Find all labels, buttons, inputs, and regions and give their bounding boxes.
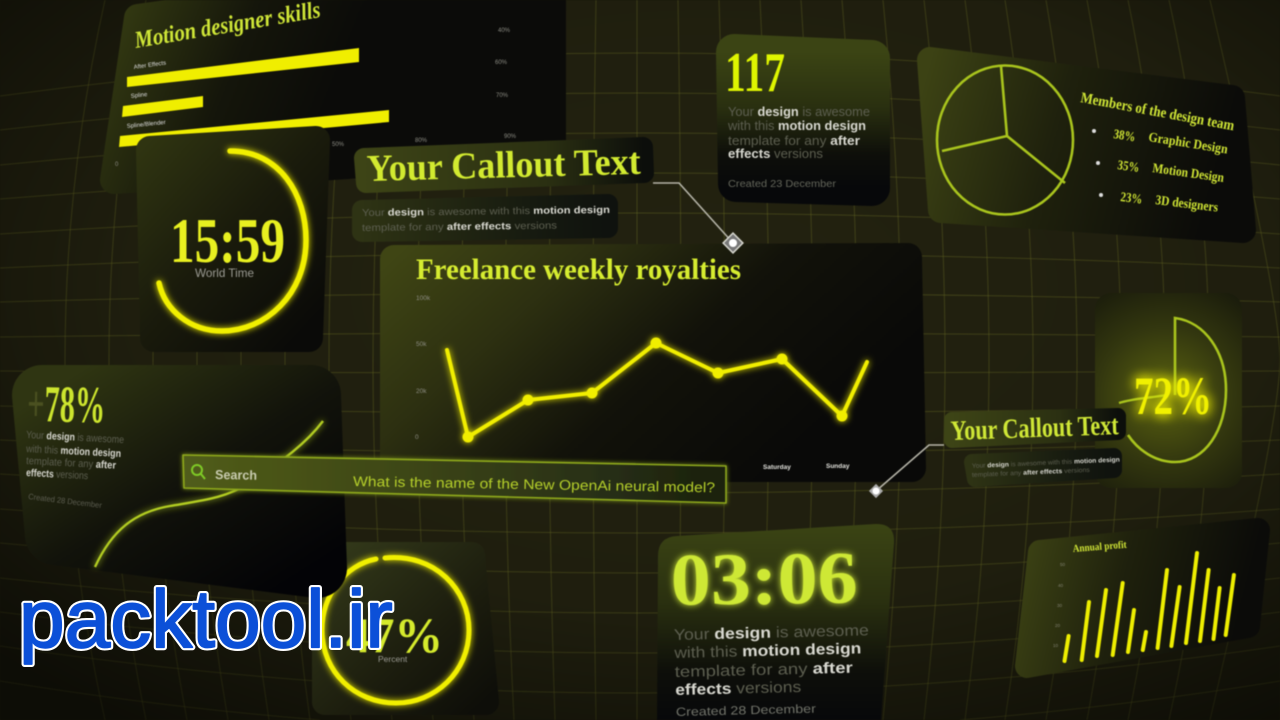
text block: 117 body: effects versions xyxy=(728,147,823,161)
heading: freelance title: Freelance weekly royalties xyxy=(416,253,741,286)
text block: 78 body: Your design is awesome xyxy=(26,429,124,446)
trend curve xyxy=(95,421,323,567)
pie chart xyxy=(937,66,1073,214)
panel: members of the design team xyxy=(930,60,1243,230)
callout body xyxy=(362,204,610,234)
watermark: packtool.ir xyxy=(19,574,393,665)
callout: right xyxy=(869,410,1120,498)
search query: What is the name of the New OpenAi neural model? xyxy=(353,473,715,495)
axis labels xyxy=(115,28,517,168)
legend: 38% xyxy=(1113,126,1137,144)
callout body: template for any after effects versions xyxy=(972,467,1091,479)
percent: 47%: 47% xyxy=(346,607,443,663)
label: percent: Percent xyxy=(378,654,408,664)
text block: 117 body: with this motion design xyxy=(727,119,866,133)
pie outline xyxy=(1128,318,1226,462)
axis labels: 40% xyxy=(498,28,511,34)
callout: top xyxy=(362,141,743,253)
axis labels: 80% xyxy=(415,138,428,144)
y axis labels: 50 xyxy=(1060,562,1066,567)
bar: after effects: After Effects xyxy=(133,61,167,71)
bar: blender xyxy=(119,110,389,147)
axis labels: 100k xyxy=(416,295,431,302)
text block: 78 body xyxy=(25,429,124,482)
label: search: Search xyxy=(215,467,257,483)
text block: 03:06 body: Your design is awesome xyxy=(674,622,869,644)
bar: blender: Spline/Blender xyxy=(127,120,166,130)
text block: 03:06 body: template for any after xyxy=(675,660,853,681)
panel: 72 percent xyxy=(1111,309,1226,472)
bar: after effects xyxy=(127,48,359,87)
y axis labels: 30 xyxy=(1057,603,1063,608)
text block: 03:06 body: with this motion design xyxy=(673,640,861,662)
axis labels: 60% xyxy=(495,60,508,66)
callout body: Your design is awesome with this motion design xyxy=(362,205,610,219)
date: 117: Created 23 December xyxy=(728,179,837,190)
panel: 47 percent ring xyxy=(322,555,486,703)
callout header: Your Callout Text xyxy=(950,410,1120,447)
callout body: template for any after effects versions xyxy=(362,221,557,234)
y axis labels: 20 xyxy=(1055,623,1061,628)
heading: annual profit: Annual profit xyxy=(1072,540,1128,555)
axis labels: 0 xyxy=(415,434,419,441)
heading: members title: Members of the design team xyxy=(1079,90,1236,134)
axis labels xyxy=(415,295,431,441)
axis labels: 50k xyxy=(416,341,427,348)
text block: 117 body: Your design is awesome xyxy=(728,105,870,119)
callout header: Your Callout Text xyxy=(366,141,641,190)
legend: 35% xyxy=(1117,157,1140,175)
panel: 78 percent xyxy=(25,376,323,568)
bars xyxy=(1064,553,1234,661)
panel: 117 stat xyxy=(725,42,872,190)
icon: search xyxy=(192,465,205,479)
axis labels: 0 xyxy=(115,162,119,168)
axis labels: 50% xyxy=(332,142,345,148)
axis labels: 90% xyxy=(504,134,517,140)
text block: 117 body: template for any after xyxy=(728,134,860,148)
text block: 03:06 body xyxy=(673,622,870,699)
text block: 78 body: template for any after xyxy=(26,455,116,472)
callout body: Your design is awesome with this motion design xyxy=(972,457,1120,470)
day labels: Saturday xyxy=(763,464,791,471)
y axis labels xyxy=(1053,562,1066,648)
bar: spline xyxy=(122,92,203,117)
legend: 23% xyxy=(1120,189,1143,207)
connector with diamond xyxy=(869,445,944,498)
panel: line chart freelance royalties xyxy=(394,253,912,471)
panel: motion designer skills xyxy=(114,0,552,180)
date: 03:06: Created 28 December xyxy=(676,702,816,719)
number: 117: 117 xyxy=(725,42,785,104)
y axis labels: 10 xyxy=(1053,643,1059,648)
day labels: Sunday xyxy=(826,463,850,470)
panel: world time clock xyxy=(150,140,316,338)
percent: +78%: +78% xyxy=(27,376,106,434)
bar: spline: Spline xyxy=(131,92,148,100)
text block: 03:06 body: effects versions xyxy=(675,679,802,699)
text block: 78 body: with this motion design xyxy=(25,443,121,460)
label: world time: World Time xyxy=(195,266,254,280)
text block: 117 body xyxy=(727,105,870,161)
day labels xyxy=(763,463,850,471)
progress ring xyxy=(322,558,469,703)
y axis labels: 40 xyxy=(1058,583,1064,588)
panel: 03:06 timer xyxy=(657,524,894,720)
time: 03:06: 03:06 xyxy=(670,538,858,622)
legend xyxy=(1092,126,1229,215)
legend: Graphic Design xyxy=(1148,129,1229,157)
date: 78: Created 28 December xyxy=(28,492,103,510)
axis labels: 20k xyxy=(416,388,427,395)
legend: 3D designers xyxy=(1155,192,1219,215)
watermark: packtool.ir xyxy=(19,574,393,665)
legend: Motion Design xyxy=(1152,160,1225,185)
text block: 78 body: effects versions xyxy=(26,467,88,482)
percent: 72%: 72% xyxy=(1134,366,1212,426)
axis labels: 70% xyxy=(496,93,509,99)
accent curve xyxy=(1119,395,1166,403)
search bar xyxy=(183,455,726,503)
callout body xyxy=(972,456,1120,479)
progress ring xyxy=(159,151,306,331)
connector with diamond xyxy=(653,183,743,253)
time: 15:59: 15:59 xyxy=(170,205,285,276)
panel: annual profit bar chart xyxy=(1027,530,1258,666)
line series xyxy=(447,338,867,442)
